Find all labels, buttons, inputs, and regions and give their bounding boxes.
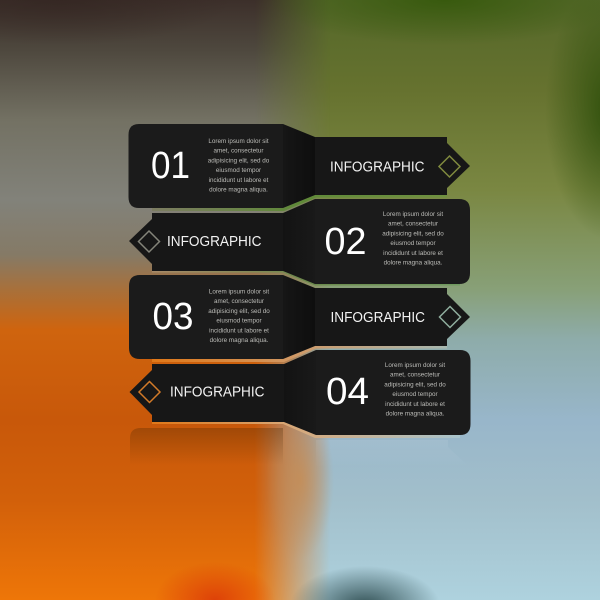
label: INFOGRAPHIC	[330, 158, 425, 176]
description: Lorem ipsum dolor sit	[208, 138, 269, 145]
description: amet, consectetur	[214, 298, 264, 305]
panel 02 with banner	[129, 199, 470, 284]
diamond	[439, 156, 460, 177]
fold	[283, 124, 315, 208]
description: amet, consectetur	[213, 148, 264, 155]
description: incididunt ut labore et	[209, 327, 269, 334]
fold	[283, 275, 315, 359]
description: dolore magna aliqua.	[386, 410, 445, 418]
description: adipisicing elit, sed do	[208, 157, 270, 164]
panel 04 with banner	[130, 350, 470, 435]
fold	[284, 350, 316, 435]
panel 03 with banner	[129, 275, 470, 359]
label: INFOGRAPHIC	[330, 309, 425, 326]
description: dolore magna aliqua.	[384, 260, 443, 266]
description: eiusmod tempor	[216, 167, 261, 174]
description: Lorem ipsum dolor sit	[385, 362, 445, 369]
banner	[130, 364, 284, 422]
description: Lorem ipsum dolor sit	[209, 288, 269, 296]
banner	[129, 213, 283, 271]
description: dolore magna aliqua.	[210, 337, 269, 344]
panel 01 with banner	[128, 124, 470, 208]
description: adipisicing elit, sed do	[382, 230, 444, 237]
description: eiusmod tempor	[390, 240, 436, 247]
reflection	[130, 428, 470, 468]
description: amet, consectetur	[388, 221, 438, 228]
description: amet, consectetur	[390, 372, 440, 379]
number 03: 03	[152, 296, 194, 338]
description: eiusmod tempor	[392, 391, 438, 398]
number 01: 01	[151, 145, 190, 187]
description: dolore magna aliqua.	[209, 186, 268, 194]
highlight edges	[152, 195, 460, 438]
label: INFOGRAPHIC	[170, 384, 265, 400]
diamond	[440, 306, 460, 328]
description: incididunt ut labore et	[383, 250, 443, 257]
banner	[315, 288, 470, 346]
number 02: 02	[324, 221, 366, 263]
diamond	[138, 231, 160, 252]
number 04: 04	[326, 371, 369, 413]
diamond	[139, 382, 160, 402]
description: incididunt ut labore et	[209, 177, 269, 184]
label: INFOGRAPHIC	[167, 233, 262, 250]
description: eiusmod tempor	[216, 318, 262, 325]
banner	[315, 137, 470, 195]
description: incididunt ut labore et	[385, 401, 445, 408]
description: adipisicing elit, sed do	[208, 308, 270, 315]
fold	[283, 199, 315, 284]
description: adipisicing elit, sed do	[384, 381, 446, 388]
description: Lorem ipsum dolor sit	[383, 211, 443, 218]
